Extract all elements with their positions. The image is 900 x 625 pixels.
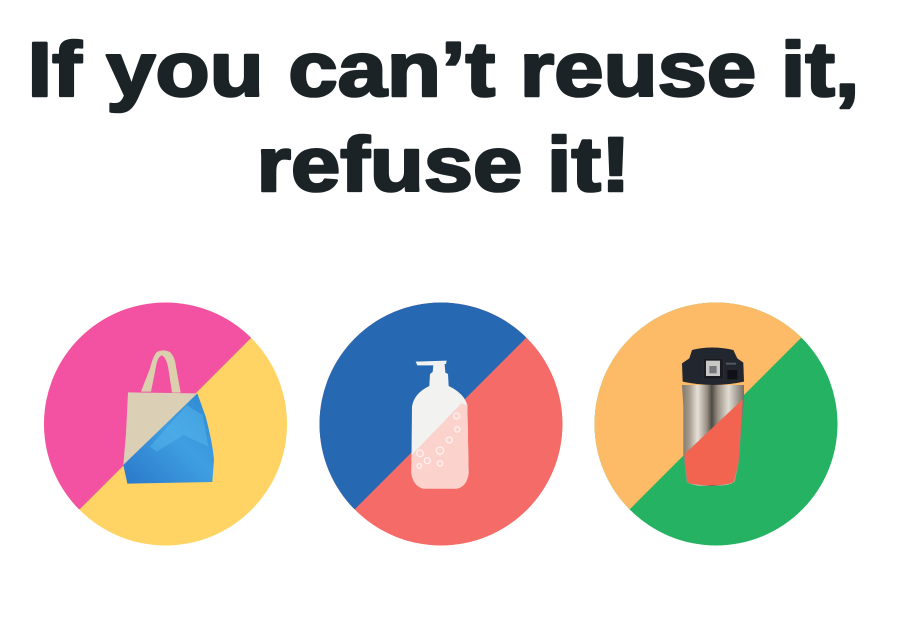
panel: reusable cup circle bbox=[594, 302, 838, 546]
icon: travel mug bbox=[682, 347, 744, 486]
icon: pump bottle bbox=[411, 361, 469, 489]
title: If you can’t reuse it, bbox=[28, 27, 860, 113]
icon: tote bag bbox=[123, 350, 214, 484]
panel: reusable bag circle bbox=[44, 302, 287, 546]
panel: reusable bottle circle bbox=[320, 302, 562, 546]
title bbox=[28, 27, 860, 208]
title: refuse it! bbox=[256, 122, 630, 208]
